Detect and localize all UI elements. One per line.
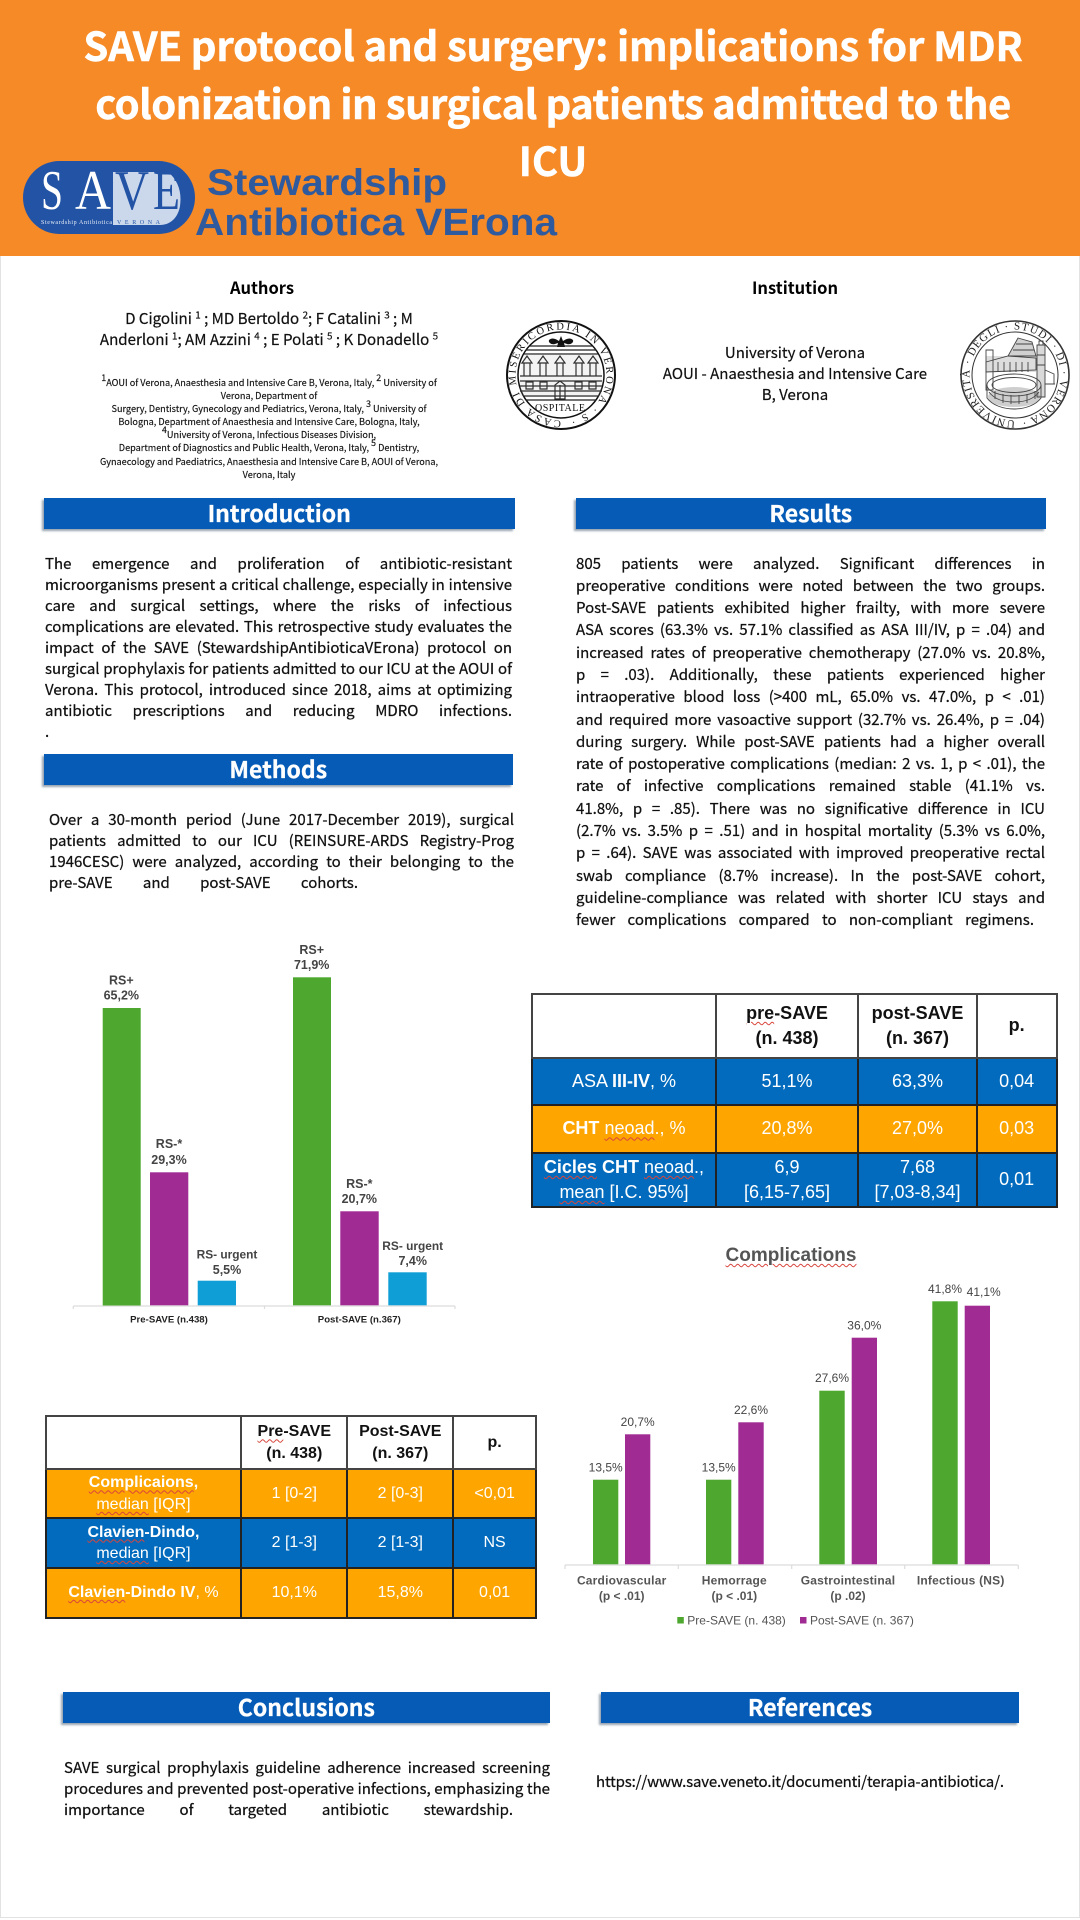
bars: Gastrointestinal: 36,0% [847,1318,882,1332]
table: ASA and chemotherapy: ASA III-IV, % [572,1071,676,1091]
text: introduction [44,553,513,742]
logo pill: VERONA [117,220,161,226]
table: complications summary: 2 [1-3] [378,1534,423,1551]
text: introduction: Verona. This protocol, introduced since 2018, aims at optimizing [45,679,512,700]
bar chart: rectal swab pre vs post SAVE [72,943,456,1326]
table: complications summary: 0,01 [479,1584,510,1601]
text: results: intraoperative blood loss (>400 mL, 65.0% vs. 47.0%, p < .01) [576,686,1045,707]
logo pill: S [41,160,63,222]
table: complications summary: 2 [1-3] [272,1534,317,1551]
text: results: p = .64). SAVE was associated with improved preoperative rectal [576,842,1045,863]
bars: Hemorrage [702,1403,768,1564]
logo pill: Stewardship Antibiotica [41,220,112,226]
text: conclusions: SAVE surgical prophylaxis guideline adherence increased screening [64,1757,550,1778]
bar: Post-SAVE RS+: RS+ [299,943,324,957]
table: complications summary: Pre-SAVE [258,1423,331,1440]
bar: Pre-SAVE RS+: RS+ [109,974,134,988]
table: complications summary: 15,8% [378,1584,423,1601]
icon: hospital seal: CASA DI MISERICORDIA IN VERONA · S · [508,322,614,428]
author affiliations: Verona, Italy [243,467,295,481]
table: ASA and chemotherapy: 20,8% [762,1118,813,1138]
table: ASA and chemotherapy: 6,9 [774,1157,800,1177]
table: complications summary: Post-SAVE [359,1423,441,1440]
text: introduction: The emergence and proliferation of antibiotic-resistant [45,553,512,574]
title: colonization in surgical patients admitted to the [95,72,1011,130]
table: complications summary [45,1415,537,1619]
bars: Hemorrage: 22,6% [734,1403,768,1417]
table: complications summary: Complicaions, [89,1474,198,1491]
text: results: 41.8%, p = .85). There was no significative difference in ICU [576,798,1045,819]
axis labels: Hemorrage [702,1574,767,1588]
logo wordmark [195,162,558,244]
bar: Post-SAVE RS-*: 20,7% [342,1192,377,1206]
logo pill [23,160,195,234]
bar: Pre-SAVE RS- urgent: 5,5% [213,1263,241,1277]
table: complications summary: p. [488,1434,502,1451]
table: ASA and chemotherapy: [7,03-8,34] [874,1182,961,1202]
logo wordmark: Antibiotica VErona [195,202,558,244]
table: complications summary: 1 [0-2] [272,1485,317,1502]
bars: Gastrointestinal [815,1318,882,1564]
bar: Pre-SAVE RS-* [150,1137,188,1305]
section heading: Methods [44,754,512,785]
bar: Pre-SAVE RS- urgent [197,1248,257,1305]
title: SAVE protocol and surgery: implications for MDR [83,15,1023,73]
bar: Pre-SAVE RS- urgent: RS- urgent [197,1248,257,1262]
institution text: AOUI - Anaesthesia and Intensive Care [663,363,927,384]
table: ASA and chemotherapy: mean [I.C. 95%] [559,1182,689,1202]
section heading: Methods: Methods [229,751,327,785]
text: results: p = .03). Additionally, these patients experienced higher [576,664,1045,685]
table: ASA and chemotherapy: 51,1% [762,1071,813,1091]
text: references: https://www.save.veneto.it/documenti/terapia-antibiotica/. [596,1771,1004,1792]
legend [677,1614,914,1628]
text: introduction: surgical prophylaxis for patients admitted to our ICU at the AOUI of [45,658,512,679]
axis labels: Infectious (NS) [917,1574,1005,1588]
author affiliations: Department of Diagnostics and Public Health, Verona, Italy, 5 Dentistry, [119,437,419,454]
text: conclusions: procedures and prevented post-operative infections, emphasizing the [64,1778,550,1799]
author names: D Cigolini 1 ; MD Bertoldo 2; F Catalini 3 ; M [125,307,413,329]
axis labels: (p .02) [830,1589,866,1603]
section heading: Results [576,498,1046,529]
table: complications summary: (n. 367) [372,1445,428,1462]
author affiliations: Verona, Department of [221,388,317,402]
bar: Pre-SAVE RS+ [103,974,141,1306]
section heading: Introduction: Introduction [208,495,351,529]
text: results: rate of postoperative complications (median: 2 vs. 1, p < .01), the [576,753,1045,774]
table: ASA and chemotherapy: p. [1009,1015,1025,1035]
bar: Post-SAVE RS-*: RS-* [346,1177,373,1191]
bars: Infectious [928,1282,1001,1564]
table: complications summary: median [IQR] [96,1496,191,1513]
icon: university seal: UNIVERSITÀ · DEGLI · STUDI · DI · VERONA · [960,322,1068,428]
author affiliations: Gynaecology and Paediatrics, Anaesthesia and Intensive Care B, AOUI of Verona, [100,454,438,468]
table: complications summary: median [IQR] [96,1545,191,1562]
text: results: increased rates of preoperative chemotherapy (27.0% vs. 20.8%, [576,642,1045,663]
logo wordmark: Stewardship [207,162,447,203]
title: ICU [519,130,587,188]
header band [0,0,1080,256]
table: ASA and chemotherapy: 7,68 [900,1157,935,1177]
logo: SAVE Stewardship Antibiotica VErona [23,160,558,244]
text: conclusions: importance of targeted antibiotic stewardship. [64,1799,513,1820]
text: introduction: complications are elevated. This retrospective study evaluates the [45,616,512,637]
axis labels: (p < .01) [599,1589,645,1603]
author names: Anderloni 1; AM Azzini 4 ; E Polati 5 ; K Donadello 5 [100,328,438,350]
text: results: Post-SAVE patients exhibited higher frailty, with more severe [576,597,1045,618]
table: complications summary: 2 [0-3] [378,1485,423,1502]
table: complications summary: <0,01 [474,1485,515,1502]
table: ASA and chemotherapy: CHT neoad., % [562,1118,686,1138]
bars: Cardiovascular: 13,5% [589,1460,623,1474]
bar: Post-SAVE RS- urgent: 7,4% [398,1254,427,1268]
heading: Authors: Authors [230,275,294,299]
heading: Institution: Institution [752,275,838,299]
text: results [576,552,1046,930]
table: ASA and chemotherapy: 0,04 [999,1071,1034,1091]
text: methods: 1946CESC) were analyzed, according to their belonging to the [49,851,514,872]
bars: Hemorrage: 13,5% [702,1460,736,1474]
table: complications summary: 10,1% [272,1584,317,1601]
bars: Gastrointestinal: 27,6% [815,1371,849,1385]
table: ASA and chemotherapy: 0,03 [999,1118,1034,1138]
bars: Infectious: 41,1% [967,1285,1001,1299]
text: results: preoperative conditions were noted between the two groups. [576,575,1045,596]
text: introduction: antibiotic prescriptions and reducing MDRO infections. [45,700,512,721]
table: ASA and chemotherapy: (n. 438) [756,1028,819,1048]
author affiliations: 4University of Verona, Infectious Diseases Division, [162,423,376,441]
text: results: during surgery. While post-SAVE patients had a higher overall [576,731,1045,752]
text: introduction: . [45,721,49,742]
legend: Pre-SAVE (n. 438) [687,1614,786,1628]
chart title: Complications: Complications [726,1245,856,1266]
author affiliations [100,371,438,481]
text: methods: patients admitted to our ICU (REINSURE-ARDS Registry-Prog [49,830,514,851]
title [83,15,1023,188]
bars: Cardiovascular [589,1415,655,1564]
table: complications summary: (n. 438) [266,1445,322,1462]
text: methods: Over a 30-month period (June 2017-December 2019), surgical [49,809,514,830]
table: ASA and chemotherapy: 63,3% [892,1071,943,1091]
legend: Post-SAVE (n. 367) [810,1614,914,1628]
table: ASA and chemotherapy: [6,15-7,65] [744,1182,830,1202]
table: ASA and chemotherapy: post-SAVE [872,1003,963,1023]
table: ASA and chemotherapy [531,993,1058,1208]
bar: Post-SAVE RS+: 71,9% [294,958,329,972]
section heading: References: References [748,1689,872,1723]
bars: Cardiovascular: 20,7% [621,1415,655,1429]
section heading: Results: Results [769,495,852,529]
institution text: University of Verona [725,342,865,363]
text: results: (2.7% vs. 3.5% p = .51) and in hospital mortality (5.3% vs 6.0%, [576,820,1045,841]
bar: Post-SAVE RS- urgent: RS- urgent [382,1239,443,1253]
table: complications summary: Clavien-Dindo, [87,1524,199,1541]
axis label: Pre-SAVE: Pre-SAVE (n.438) [130,1314,208,1326]
text: results: rate of infective complications remained stable (41.1% vs. [576,775,1045,796]
institution text [662,342,927,405]
table: ASA and chemotherapy: (n. 367) [886,1028,949,1048]
text: methods [49,809,514,893]
table: ASA and chemotherapy: 0,01 [999,1169,1034,1189]
bars: Infectious: 41,8% [928,1282,962,1296]
author affiliations: 1AOUI of Verona, Anaesthesia and Intensive Care B, Verona, Italy, 2 University of [101,371,437,389]
axis labels: Gastrointestinal [801,1574,895,1588]
bar chart: complications [564,1282,1019,1628]
text: results: ASA scores (63.3% vs. 57.1% classified as ASA III/IV, p = .04) and [576,619,1045,640]
text: methods: pre-SAVE and post-SAVE cohorts. [49,872,358,893]
logo pill: V [115,160,149,222]
section heading: References [601,1692,1019,1723]
table: ASA and chemotherapy: Cicles CHT neoad., [544,1157,704,1177]
table: ASA and chemotherapy: pre-SAVE [746,1003,828,1023]
section heading: Conclusions: Conclusions [238,1689,375,1723]
author names [100,307,438,350]
section heading: Conclusions [63,1692,550,1723]
institution text: B, Verona [762,384,828,405]
table: complications summary: Clavien-Dindo IV, % [68,1584,219,1601]
text: conclusions [64,1757,550,1820]
table: ASA and chemotherapy: 27,0% [892,1118,943,1138]
table: complications summary: NS [484,1534,506,1551]
bar: Post-SAVE RS+ [293,943,331,1305]
text: results: guideline-compliance was related with shorter ICU stays and [576,887,1045,908]
text: results: fewer complications compared to non-compliant regimens. [576,909,1034,930]
bar: Pre-SAVE RS-*: RS-* [156,1137,182,1151]
axis label: Post-SAVE: Post-SAVE (n.367) [318,1314,401,1326]
section heading: Introduction [44,498,514,529]
text: results: and required more vasoactive support (32.7% vs. 26.4%, p = .04) [576,709,1045,730]
text: introduction: microorganisms present a critical challenge, especially in intensive [45,574,512,595]
text: results: 805 patients were analyzed. Significant differences in [576,552,1045,574]
author affiliations: Surgery, Dentistry, Gynecology and Pediatrics, Verona, Italy, 3 University of [112,397,426,415]
text: results: swab compliance (8.7% increase). In the post-SAVE cohort, [576,865,1045,886]
axis labels [577,1574,1005,1603]
logo pill: E [153,160,180,222]
axis labels: Cardiovascular [577,1574,667,1588]
bar: Pre-SAVE RS-*: 29,3% [151,1153,187,1167]
bar: Post-SAVE RS-* [340,1177,379,1305]
logo pill: A [75,160,111,222]
text: introduction: care and surgical settings, where the risks of infectious [45,595,512,616]
author affiliations: Bologna, Department of Anaesthesia and Intensive Care, Bologna, Italy, [118,414,420,428]
axis labels: (p < .01) [711,1589,757,1603]
text: introduction: impact of the SAVE (StewardshipAntibioticaVErona) protocol on [45,637,512,658]
bar: Pre-SAVE RS+: 65,2% [104,988,139,1002]
icon: hospital seal: OSPITALE [535,403,585,414]
bar: Post-SAVE RS- urgent [382,1239,443,1305]
